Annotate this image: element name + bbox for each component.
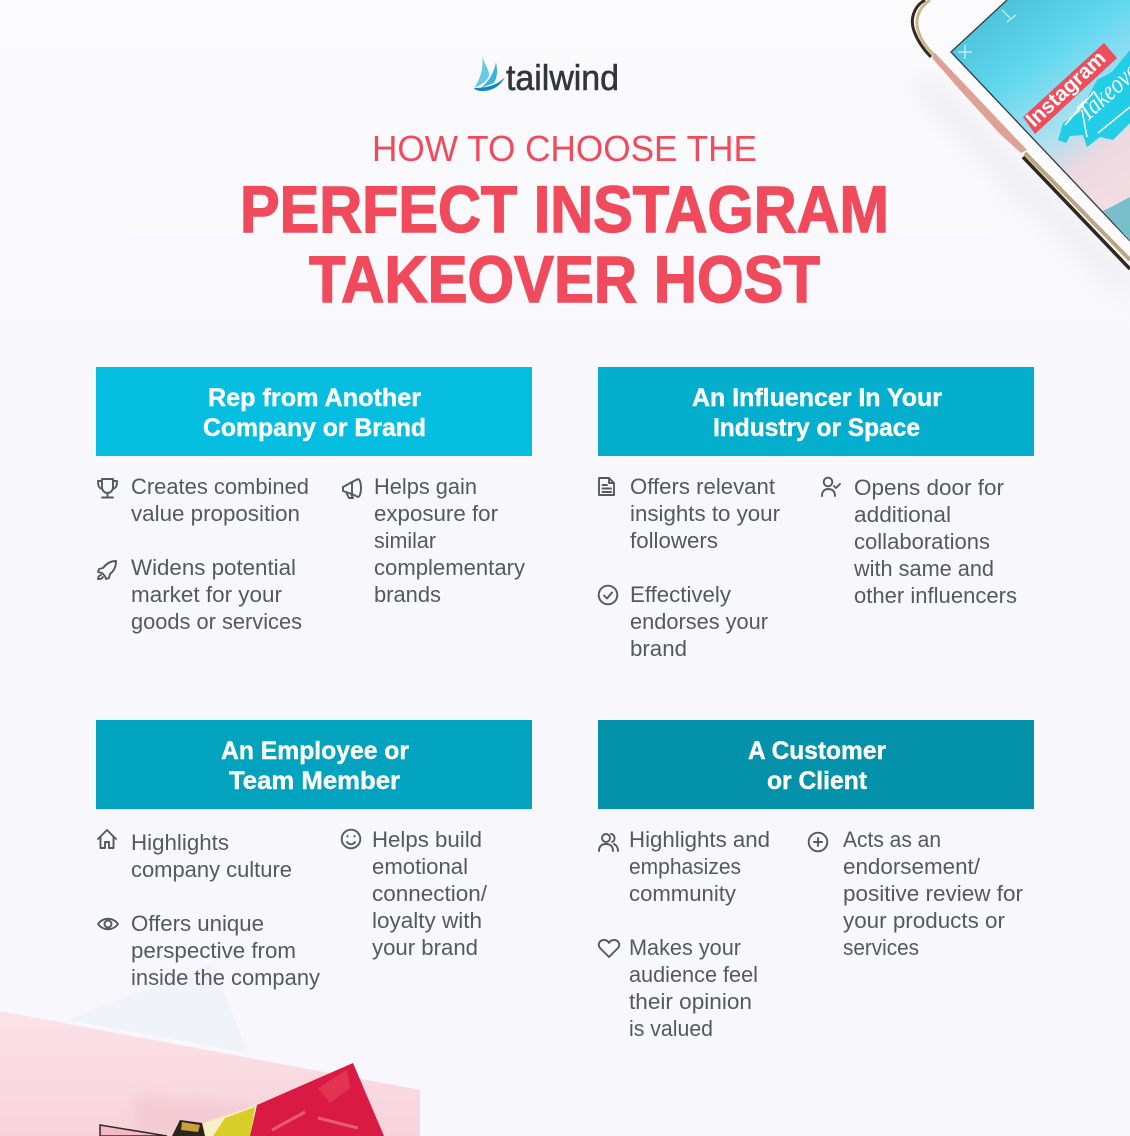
panel: employee <box>96 720 532 990</box>
text: helps gain exposure: complementary <box>374 555 525 580</box>
text: offers unique <box>131 911 320 990</box>
text: widens potential: goods or services <box>131 609 302 634</box>
text: offers relevant: insights to your <box>630 501 780 526</box>
text: widens potential <box>131 555 302 634</box>
panel heading <box>598 367 1034 456</box>
text: opens door: other influencers <box>854 583 1017 608</box>
text: makes audience <box>629 935 758 1041</box>
title line 3: TAKEOVER HOST <box>309 242 820 316</box>
text: offers unique: inside the company <box>131 965 320 990</box>
text: effectively endorses: brand <box>630 636 687 661</box>
title <box>240 128 889 316</box>
icon: plus circle <box>809 833 827 851</box>
text: helps build: your brand <box>372 935 478 960</box>
text: highlights community: community <box>629 881 736 906</box>
icon: eye <box>98 919 118 929</box>
icon: document <box>599 478 614 495</box>
text: highlights community: emphasizes <box>629 854 741 879</box>
panel heading: Industry or Space <box>713 414 920 442</box>
icon: trophy <box>98 479 117 498</box>
text: highlights community <box>629 827 770 906</box>
text: acts as endorsement: services <box>843 935 919 960</box>
panel: influencer <box>598 367 1034 661</box>
text: widens potential: market for your <box>131 582 282 607</box>
panel heading <box>598 720 1034 809</box>
phone photo <box>912 0 1130 300</box>
text: makes audience: is valued <box>629 1016 713 1041</box>
text: acts as endorsement: Acts as an <box>843 827 941 852</box>
icon: smiley <box>342 830 360 848</box>
text: helps gain exposure: Helps gain <box>374 474 477 499</box>
text: effectively endorses: endorses your <box>630 609 768 634</box>
text: helps build: loyalty with <box>372 908 482 933</box>
panel heading: An Employee or <box>221 737 409 765</box>
text: acts as endorsement <box>843 827 1023 960</box>
logo <box>474 55 619 98</box>
title line 1: HOW TO CHOOSE THE <box>372 128 757 169</box>
icon: person check <box>822 478 840 496</box>
text: makes audience: audience feel <box>629 962 758 987</box>
text: makes audience: Makes your <box>629 935 741 960</box>
text: helps build: Helps build <box>372 827 482 852</box>
text: helps gain exposure: exposure for <box>374 501 498 526</box>
text: offers unique: perspective from <box>131 938 296 963</box>
text: creates combined: Creates combined <box>131 474 309 499</box>
panel heading: An Influencer In Your <box>692 384 942 412</box>
panel heading: Rep from Another <box>208 384 421 412</box>
text: makes audience: their opinion <box>629 989 752 1014</box>
icon: heart <box>599 940 619 957</box>
text: opens door <box>853 475 1017 608</box>
text: widens potential: Widens potential <box>131 555 296 580</box>
panel: customer <box>598 720 1034 1041</box>
text: creates combined <box>131 474 309 526</box>
icon: people <box>599 834 618 851</box>
icon: check circle <box>599 586 617 604</box>
text: highlights community: Highlights and <box>629 827 770 852</box>
panel heading <box>96 367 532 456</box>
text: helps build: connection/ <box>372 881 488 906</box>
text: offers relevant: followers <box>630 528 718 553</box>
text: effectively endorses <box>630 582 768 661</box>
text: opens door: additional <box>854 502 951 527</box>
text: opens door: collaborations <box>854 529 990 554</box>
text: effectively endorses: Effectively <box>630 582 731 607</box>
text: helps gain exposure: similar <box>374 528 436 553</box>
text: helps build <box>372 827 488 960</box>
text: helps build: emotional <box>372 854 468 879</box>
panel: rep from another company <box>96 367 532 634</box>
text: highlights culture: company culture <box>131 857 292 882</box>
icon: megaphone <box>343 479 361 498</box>
text: creates combined: value proposition <box>131 501 300 526</box>
text: offers relevant <box>630 474 780 553</box>
panel heading: A Customer <box>748 737 886 765</box>
flat-lay photo: pink box and wrapping <box>0 1011 420 1136</box>
icon: rocket <box>98 561 116 579</box>
text: opens door: Opens door for <box>854 475 1004 500</box>
text: helps gain exposure: brands <box>374 582 441 607</box>
title line 2: PERFECT INSTAGRAM <box>240 172 889 246</box>
text: acts as endorsement: your products or <box>843 908 1005 933</box>
icon: house <box>98 830 116 848</box>
text: acts as endorsement: positive review for <box>843 881 1023 906</box>
instagram label: Instagram <box>1022 47 1111 132</box>
logo sail icon <box>474 55 505 91</box>
logo wordmark: tailwind <box>506 57 619 98</box>
text: acts as endorsement: endorsement/ <box>843 854 981 879</box>
panel heading <box>96 720 532 809</box>
takeover scribble <box>1058 50 1130 147</box>
text: opens door: with same and <box>853 556 994 581</box>
panel heading: or Client <box>767 767 868 795</box>
text: highlights culture: Highlights <box>131 830 229 855</box>
text: offers relevant: Offers relevant <box>630 474 775 499</box>
text: highlights culture <box>131 830 292 882</box>
panel heading: Team Member <box>229 767 400 795</box>
text: offers unique: Offers unique <box>131 911 264 936</box>
panel heading: Company or Brand <box>203 414 426 442</box>
text: helps gain exposure <box>374 474 525 607</box>
